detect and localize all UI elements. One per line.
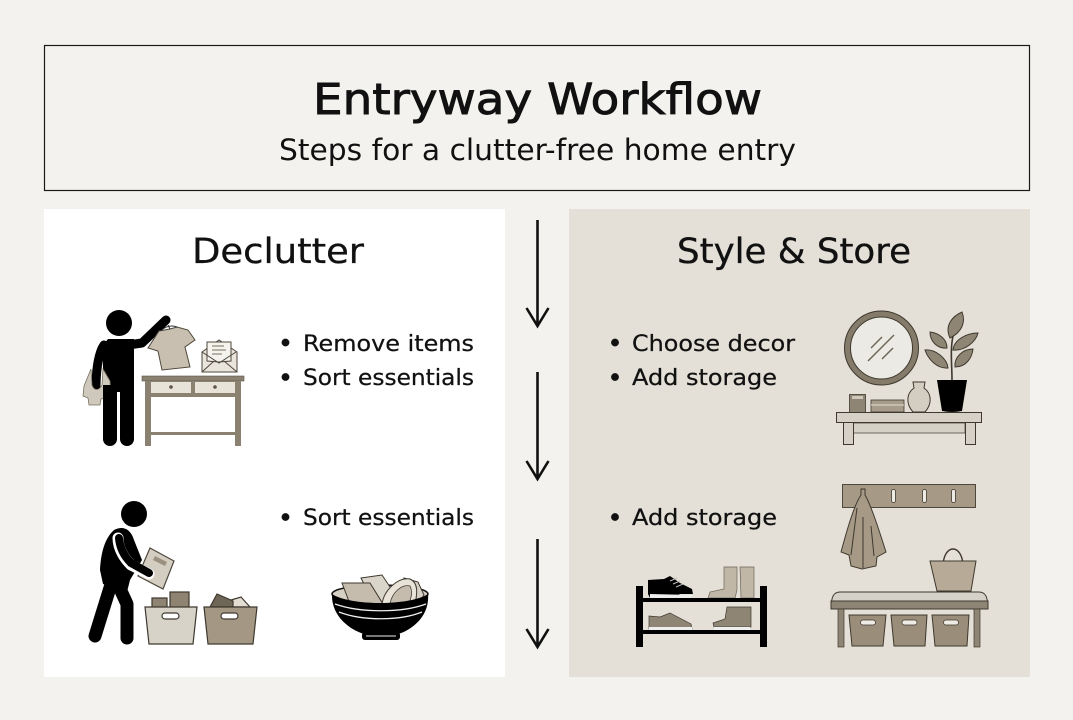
icon: hooks, towel, bag and storage bench: [831, 484, 988, 647]
dark bin: [204, 594, 257, 644]
shelf: [853, 423, 965, 433]
title: Entryway Workflow: [313, 75, 762, 125]
subtitle: Steps for a clutter-free home entry: [279, 133, 796, 167]
icon: mirror, plant and shelf: [836, 311, 982, 444]
icon: person sorting into bins: [95, 501, 257, 644]
shirt on hanger: [148, 327, 195, 370]
bullet list: add storage: Add storage: [632, 505, 777, 531]
arrow 2: [526, 372, 548, 479]
icon: person holding shirt at console table: [83, 310, 244, 446]
bullet list: remove items: Remove items: [303, 331, 474, 357]
heading: declutter: Declutter: [192, 232, 365, 272]
black shoe: [648, 576, 693, 598]
heading: style and store: Style & Store: [677, 232, 911, 272]
title banner: [44, 46, 1030, 190]
pot: [937, 380, 967, 412]
panel: declutter: [44, 209, 505, 677]
clothing over arm: [83, 369, 111, 405]
console table: [142, 376, 244, 446]
icon: bowl of items: [332, 575, 428, 640]
towel: [841, 489, 886, 569]
bullet list: choose decor: Add storage: [632, 365, 777, 391]
boots top: [708, 567, 737, 598]
bench: [831, 592, 988, 609]
arrow 1: [526, 220, 548, 326]
bullet list: remove items: Sort essentials: [303, 365, 474, 391]
envelope: [202, 340, 237, 372]
arm over paper: [118, 538, 149, 574]
bag: [930, 549, 976, 591]
panel: style and store: [569, 209, 1030, 677]
hook rail: [842, 484, 976, 508]
baskets: [849, 615, 969, 646]
bullet list: choose decor: Choose decor: [632, 331, 796, 357]
paper held: [138, 548, 174, 589]
light bin: [145, 592, 197, 644]
vase: [908, 382, 930, 412]
bullet list: sort essentials: Sort essentials: [303, 505, 474, 531]
candle and books: [850, 394, 866, 412]
lower shoes: [649, 613, 692, 629]
bullet list: choose decor: [611, 331, 796, 391]
rack: [636, 586, 767, 647]
arrow 3: [526, 539, 548, 647]
plant: [925, 312, 978, 380]
bullet list: remove items: [282, 331, 474, 391]
icon: shoe rack: [636, 567, 767, 647]
